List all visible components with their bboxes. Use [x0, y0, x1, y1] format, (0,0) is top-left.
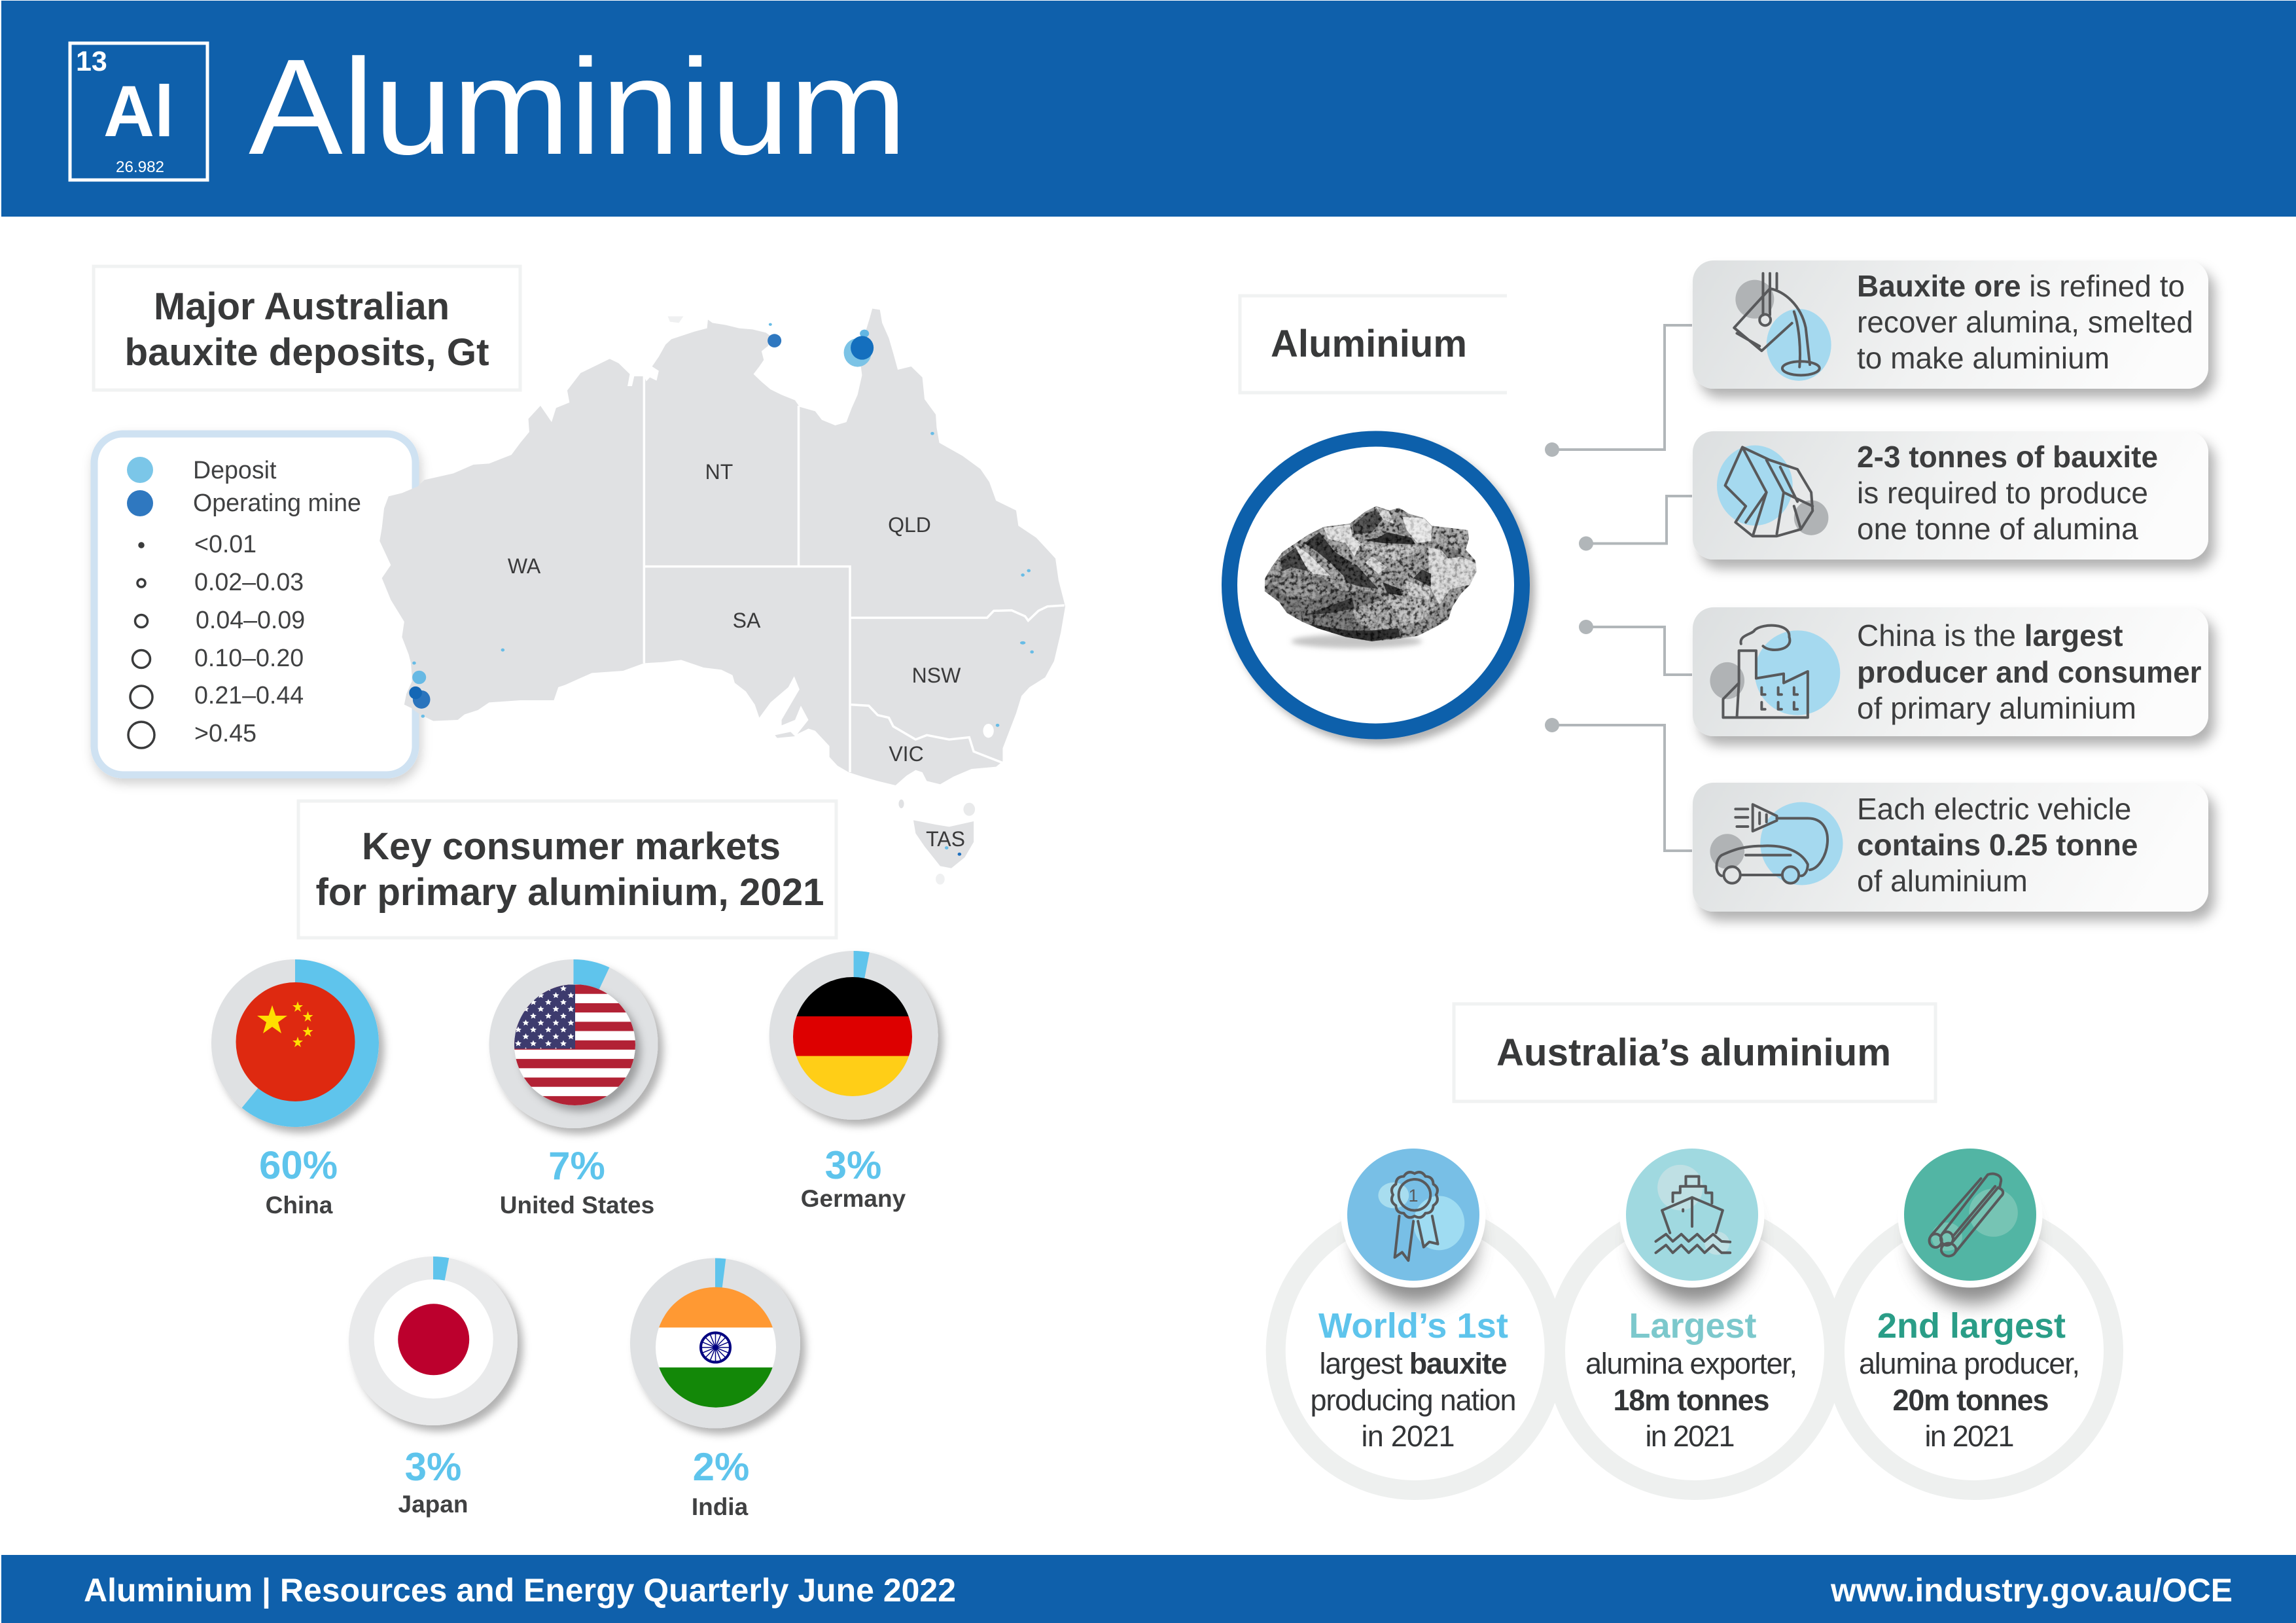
- legend: size classes: 0.10–0.20: [194, 644, 304, 671]
- element tile: Al: Al: [103, 71, 174, 152]
- legend: deposit: [127, 456, 277, 484]
- rosette number: 1: [1408, 1186, 1419, 1205]
- badge: 2nd largest alumina producer: 20m tonnes: [1892, 1383, 2049, 1417]
- title: Aluminium: [249, 31, 907, 183]
- value: 3%: 3%: [405, 1445, 461, 1489]
- map: state labels: WA: [508, 554, 541, 578]
- text: Each electric vehicle: [1857, 792, 2131, 826]
- label: India: India: [692, 1493, 749, 1520]
- donut: United States 7%: [489, 959, 658, 1219]
- panel: map legend: [94, 434, 415, 775]
- badge: world's 1st: in 2021: [1361, 1419, 1455, 1453]
- legend: size classes: [128, 530, 305, 748]
- card: China largest: [1693, 607, 2208, 736]
- label: Japan: Japan: [398, 1491, 468, 1518]
- icon: aluminium pipes: [1930, 1174, 2018, 1256]
- card: electric vehicle: [1693, 783, 2208, 912]
- card: China largest: producer and consumer: [1857, 655, 2202, 689]
- flag: Germany: [792, 976, 913, 1097]
- map: state labels: SA: [733, 609, 761, 632]
- map: state labels: NT: [705, 460, 733, 484]
- icon: ladle pouring: [1734, 274, 1831, 381]
- value: 60%: 60%: [259, 1143, 338, 1187]
- heading: Aluminium: [1240, 296, 1507, 393]
- map: state labels: TAS: [926, 827, 965, 851]
- text: World’s 1st: [1318, 1306, 1508, 1346]
- badge: 2nd largest alumina producer: [1835, 1143, 2113, 1490]
- value: 7%: 7%: [548, 1144, 605, 1188]
- heading: major bauxite deposits: bauxite deposits, Gt: [124, 331, 489, 374]
- header banner: [1, 1, 2296, 217]
- badge: world's 1st: [1276, 1143, 1555, 1490]
- heading: key consumer markets: [298, 801, 836, 938]
- heading: key consumer markets: for primary aluminium, 2021: [315, 871, 824, 914]
- rock: [1263, 504, 1479, 649]
- flag: China: [236, 982, 356, 1102]
- map of Australia: [380, 309, 1065, 885]
- legend: size classes: 0.21–0.44: [194, 681, 304, 709]
- text: 2-3 tonnes of bauxite: [1857, 440, 2158, 474]
- map: state labels: NSW: [912, 664, 961, 687]
- icon: ship: [1656, 1165, 1730, 1255]
- icon: rock: [1717, 446, 1828, 536]
- heading: major bauxite deposits: [94, 266, 520, 390]
- card: bauxite ore: [1693, 260, 2208, 389]
- card: tonnes of bauxite: is required to produce: [1857, 476, 2148, 510]
- element tile: Al: 13: [76, 46, 107, 77]
- card: China largest: of primary aluminium: [1857, 691, 2136, 725]
- legend: size classes: <0.01: [194, 530, 256, 558]
- badge: 2nd largest alumina producer: alumina producer,: [1859, 1347, 2080, 1380]
- label: Germany: Germany: [801, 1185, 906, 1212]
- heading: key consumer markets: Key consumer markets: [362, 825, 781, 868]
- text: Bauxite ore is refined to: [1857, 269, 2185, 303]
- flag: Japan: [374, 1279, 493, 1399]
- donut: China 60%: [211, 959, 379, 1219]
- footer: report title: Aluminium | Resources and Energy Quarterly June 2022: [84, 1572, 956, 1609]
- legend: size classes: 0.02–0.03: [194, 568, 304, 596]
- card: bauxite ore: to make aluminium: [1857, 341, 2110, 375]
- badge: largest alumina exporter: 18m tonnes: [1614, 1383, 1769, 1417]
- flag: United States: [514, 984, 636, 1105]
- map: deposits and mines: [409, 323, 1034, 856]
- badge: 2nd largest alumina producer: in 2021: [1925, 1419, 2014, 1453]
- legend: operating mine: Operating mine: [193, 489, 361, 516]
- donut: India 2%: [630, 1258, 800, 1520]
- badge: largest alumina exporter: alumina exporter,: [1585, 1347, 1797, 1380]
- flag: India: [654, 1287, 777, 1408]
- label: United States: United States: [500, 1192, 654, 1219]
- map: state labels: QLD: [888, 513, 931, 537]
- text: Largest: [1629, 1306, 1757, 1346]
- badge: largest alumina exporter: [1555, 1143, 1834, 1490]
- connectors: [1545, 325, 1692, 851]
- card: tonnes of bauxite: one tonne of alumina: [1857, 512, 2138, 546]
- badge: largest alumina exporter: in 2021: [1645, 1419, 1735, 1453]
- icon: factory: [1710, 626, 1840, 717]
- value: 3%: 3%: [825, 1143, 881, 1187]
- card: electric vehicle: contains 0.25 tonne: [1857, 828, 2138, 862]
- card: bauxite ore: recover alumina, smelted: [1857, 305, 2193, 339]
- text: China is the largest: [1857, 618, 2123, 652]
- badge: world's 1st: producing nation: [1310, 1383, 1517, 1417]
- donut: Germany 3%: [769, 951, 938, 1212]
- text: 2nd largest: [1877, 1306, 2066, 1346]
- footer bar: [1, 1555, 2296, 1623]
- legend: size classes: 0.04–0.09: [196, 606, 305, 633]
- heading: Aluminium: Aluminium: [1271, 323, 1467, 365]
- photo: bauxite rock in blue ring: [1229, 438, 1522, 732]
- element tile: Al: [70, 43, 207, 180]
- element tile: Al: 26.982: [116, 158, 164, 176]
- donut: Japan 3%: [349, 1257, 518, 1518]
- heading: Australia's aluminium: Australia’s aluminium: [1496, 1031, 1891, 1074]
- value: 2%: 2%: [693, 1445, 749, 1489]
- icon: rosette: [1378, 1172, 1464, 1260]
- map: state borders: [644, 376, 1065, 772]
- label: China: China: [266, 1192, 333, 1219]
- footer: website: www.industry.gov.au/OCE: [1830, 1572, 2233, 1609]
- badge: world's 1st: largest bauxite: [1319, 1347, 1508, 1380]
- map: Tasmania and islands: [668, 316, 994, 885]
- legend: deposit: Deposit: [193, 456, 277, 484]
- legend: size classes: >0.45: [194, 719, 256, 747]
- icon: EV plug and car: [1710, 802, 1843, 885]
- map: state labels: [508, 460, 965, 851]
- map: state labels: VIC: [889, 742, 924, 766]
- card: tonnes of bauxite: [1693, 431, 2208, 560]
- heading: major bauxite deposits: Major Australian: [154, 285, 450, 328]
- heading: Australia's aluminium: [1454, 1004, 1935, 1101]
- card: electric vehicle: of aluminium: [1857, 864, 2028, 898]
